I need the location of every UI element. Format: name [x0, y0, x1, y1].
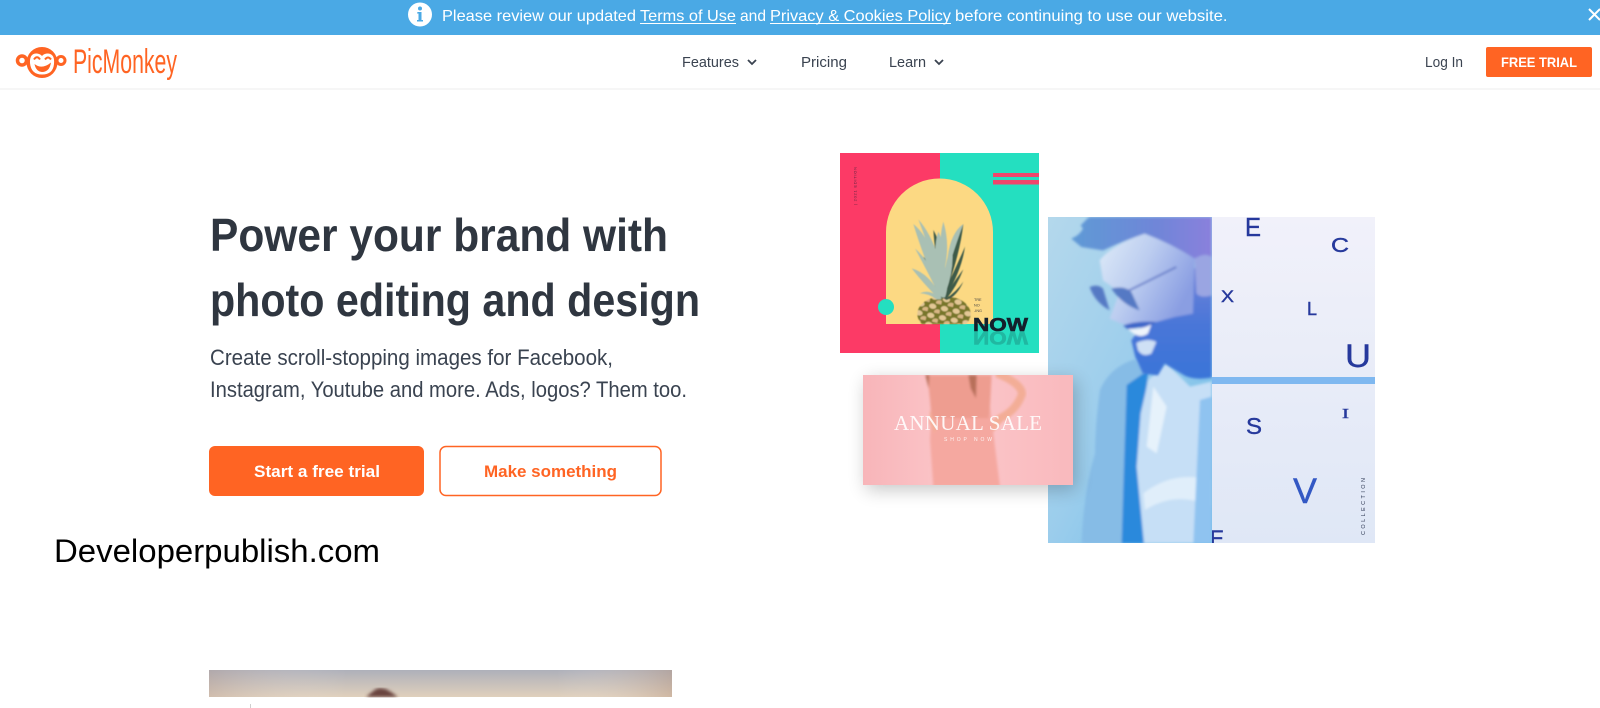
- letters: [1210, 212, 1371, 551]
- poster small text: [974, 298, 982, 313]
- poster small text: TRE: [974, 298, 982, 302]
- tree silhouette: [366, 688, 398, 697]
- poster NOW: NOW: [973, 328, 1028, 348]
- torso: [1082, 359, 1212, 543]
- sale subtitle: SHOP NOW: [944, 437, 992, 443]
- head: [1071, 217, 1212, 379]
- banner message: and: [740, 8, 766, 25]
- poster stripes: [993, 173, 1039, 184]
- letters: E: [1245, 212, 1261, 242]
- panel: letters: [1210, 212, 1375, 551]
- button: make something: Make something: [484, 462, 617, 481]
- hero subheading: [210, 345, 687, 402]
- letters: X: [1221, 287, 1234, 306]
- banner message: Please review our updated: [442, 8, 636, 25]
- poster: man with EXCLUSIVE letters: [1048, 212, 1375, 551]
- letters: U: [1345, 338, 1371, 374]
- watermark text: Developerpublish.com: [54, 533, 380, 569]
- hero subheading: Instagram, Youtube and more. Ads, logos? Them too.: [210, 377, 687, 402]
- tick mark: [250, 704, 251, 708]
- photo: woman: [925, 373, 1022, 487]
- hero subheading: Create scroll-stopping images for Facebook,: [210, 345, 613, 370]
- button: free trial: [1486, 47, 1592, 77]
- letters: I: [1342, 407, 1349, 422]
- letters: L: [1307, 299, 1317, 319]
- letters: V: [1293, 472, 1318, 511]
- wordmark: PicMonkey: [73, 43, 177, 81]
- letters: C: [1331, 235, 1349, 257]
- bottom photo: [209, 670, 672, 697]
- logo: PicMonkey: [18, 43, 177, 81]
- button: start a free trial: [209, 446, 424, 496]
- banner message: [442, 8, 1228, 25]
- poster edition text: | 2021 EDITION: [852, 167, 858, 205]
- hero heading: [210, 209, 700, 326]
- icon: info: [408, 2, 432, 26]
- collection label: COLLECTION: [1361, 478, 1367, 535]
- poster small text: -ING: [974, 309, 982, 313]
- notice banner: [0, 0, 1600, 35]
- sale title: ANNUAL SALE: [894, 411, 1042, 435]
- letters: E: [1210, 526, 1224, 551]
- arch: [886, 178, 993, 324]
- button: start a free trial: Start a free trial: [254, 462, 380, 481]
- button: make something: [440, 446, 661, 496]
- poster circle: [878, 299, 894, 315]
- nav: Log In: Log In: [1425, 54, 1463, 71]
- poster NOW: NOW: [973, 315, 1028, 335]
- banner message: Terms of Use: [640, 8, 736, 25]
- banner: annual sale: [863, 373, 1076, 490]
- pineapple: [912, 219, 971, 332]
- photo: man: [1048, 217, 1212, 543]
- hero heading: photo editing and design: [210, 274, 700, 326]
- hero heading: Power your brand with: [210, 209, 668, 261]
- poster NOW: [973, 315, 1028, 348]
- navigation bar: [0, 35, 1600, 90]
- poster small text: NO: [974, 304, 980, 308]
- icon: close: [1589, 9, 1600, 20]
- letters: S: [1246, 413, 1262, 439]
- nav: Features: Features: [682, 54, 739, 71]
- button: free trial: FREE TRIAL: [1501, 54, 1577, 70]
- banner message: Privacy & Cookies Policy: [770, 8, 951, 25]
- banner message: before continuing to use our website.: [955, 8, 1228, 25]
- nav: Learn: Learn: [889, 54, 926, 71]
- poster: pineapple: [840, 153, 1039, 353]
- nav: Pricing: Pricing: [801, 54, 847, 71]
- icon: monkey face: [18, 47, 65, 78]
